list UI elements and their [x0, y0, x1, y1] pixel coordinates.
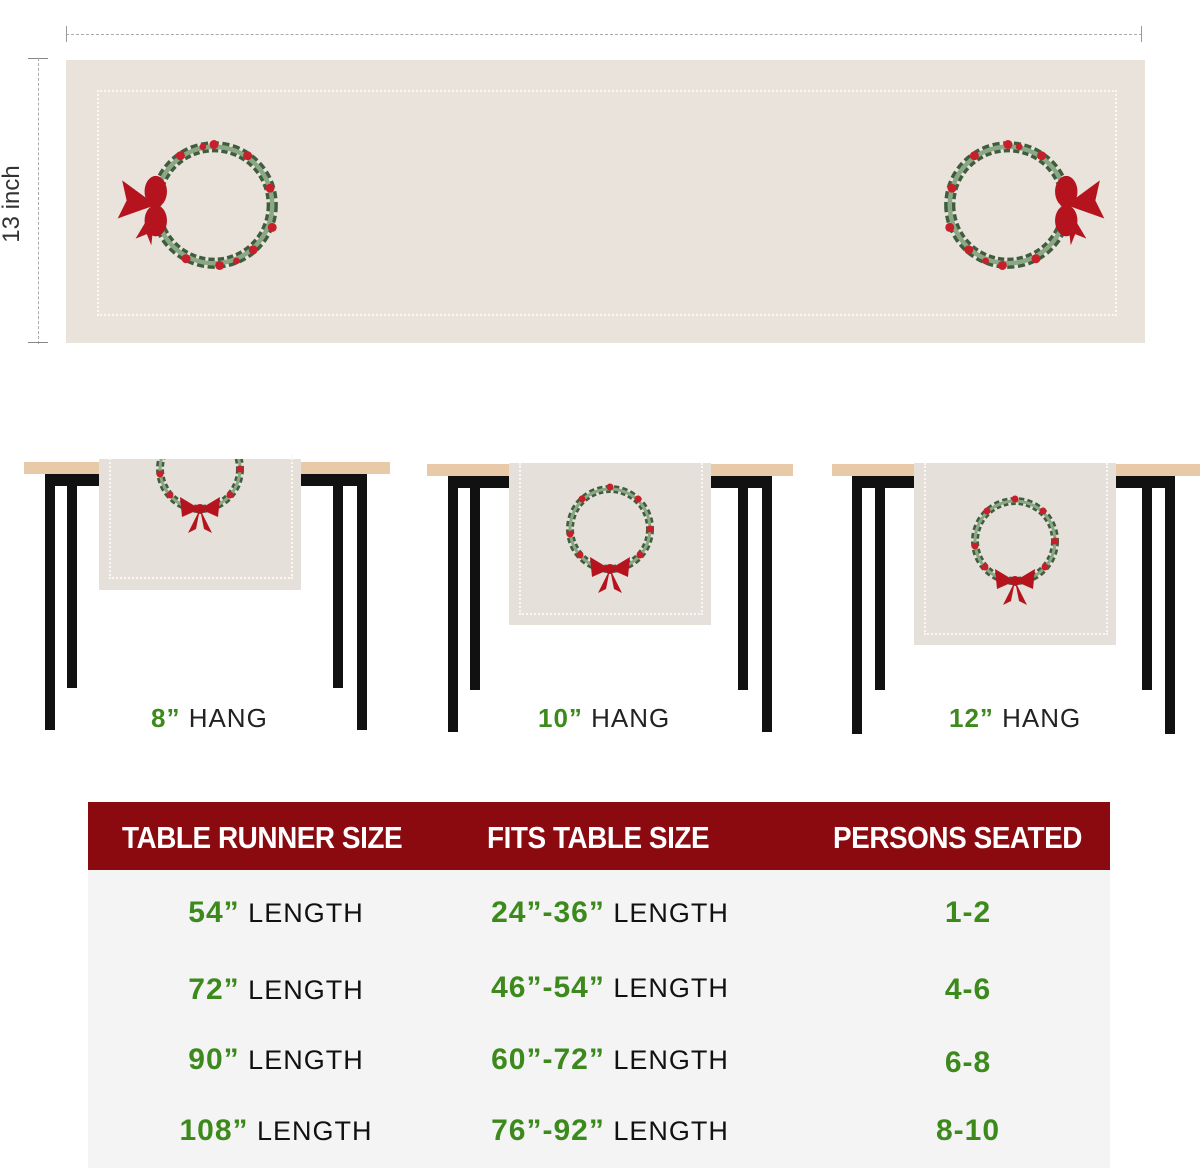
table rows: 8-10 — [936, 1114, 1000, 1147]
runner top view — [66, 60, 1145, 343]
table rows: 46”-54” LENGTH — [491, 971, 729, 1004]
size table — [88, 802, 1110, 1168]
icon: wreath right — [945, 140, 1104, 270]
table rows: 60”-72” LENGTH — [491, 1043, 729, 1076]
table rows: 4-6 — [945, 973, 991, 1006]
table rows: 1-2 — [945, 896, 991, 929]
table rows: 54” LENGTH — [188, 896, 364, 929]
table 8 inch hang — [24, 455, 390, 730]
label: 10 hang: 10” HANG — [538, 703, 670, 733]
table rows: 76”-92” LENGTH — [491, 1114, 729, 1147]
table rows: 24”-36” LENGTH — [491, 896, 729, 929]
table rows — [179, 896, 1000, 1147]
label: 12 hang: 12” HANG — [949, 703, 1081, 733]
table rows: 108” LENGTH — [179, 1114, 373, 1147]
table rows: 72” LENGTH — [188, 973, 364, 1006]
table 12 inch hang — [832, 463, 1200, 734]
table header: FITS TABLE SIZE — [487, 820, 709, 855]
dimension: length — [66, 26, 1142, 42]
table 10 inch hang — [427, 463, 793, 732]
table header: PERSONS SEATED — [833, 820, 1082, 855]
table rows: 90” LENGTH — [188, 1043, 364, 1076]
table rows: 6-8 — [945, 1046, 991, 1079]
table header: TABLE RUNNER SIZE — [122, 820, 402, 855]
icon: wreath left — [118, 140, 277, 270]
label: 8 hang: 8” HANG — [151, 703, 268, 733]
table header — [88, 802, 1110, 870]
